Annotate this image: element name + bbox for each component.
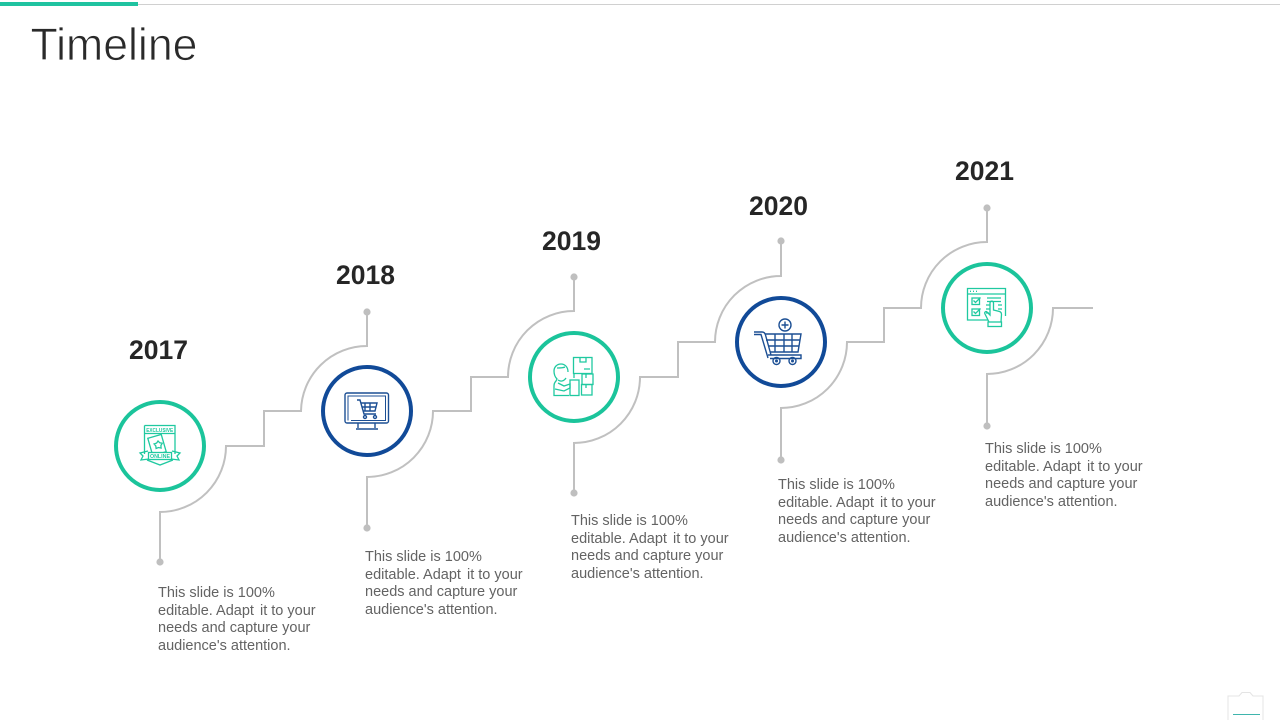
description 2019: audience's attention. xyxy=(571,566,704,582)
icon: clipboard corner mark xyxy=(1228,692,1263,720)
dots 2021 xyxy=(983,204,991,430)
icon: cart with plus xyxy=(754,319,801,364)
icon: monitor with cart xyxy=(345,393,388,429)
icon: exclusive online badge: EXCLUSIVE xyxy=(146,428,173,434)
description 2020: audience's attention. xyxy=(778,530,911,546)
description 2021: editable. Adapt it to your xyxy=(985,459,1143,475)
title: Timeline xyxy=(30,19,198,70)
description 2018: This slide is 100% xyxy=(365,549,482,565)
description 2019: needs and capture your xyxy=(571,548,724,564)
connector: 2018 to 2019 xyxy=(367,277,574,528)
connector: 2020 to 2021 xyxy=(781,208,987,460)
description 2017: needs and capture your xyxy=(158,620,311,636)
description 2021: audience's attention. xyxy=(985,494,1118,510)
milestone 2019 xyxy=(530,226,729,582)
description 2018: needs and capture your xyxy=(365,584,518,600)
icon: exclusive online badge: ONLINE xyxy=(150,454,171,460)
dots 2018 xyxy=(363,308,371,532)
ring 2020 xyxy=(737,298,825,386)
description 2017: This slide is 100% xyxy=(158,585,275,601)
description 2021: needs and capture your xyxy=(985,476,1138,492)
description 2017: audience's attention. xyxy=(158,638,291,654)
connector: 2019 to 2020 xyxy=(574,241,781,493)
ring 2019 xyxy=(530,333,618,421)
ring 2017 xyxy=(116,402,204,490)
year 2021: 2021 xyxy=(955,156,1014,186)
description 2021: This slide is 100% xyxy=(985,441,1102,457)
dots 2020 xyxy=(777,237,785,464)
year 2017: 2017 xyxy=(129,335,188,365)
dot 2017 xyxy=(156,558,164,566)
description 2019: This slide is 100% xyxy=(571,513,688,529)
description 2017: editable. Adapt it to your xyxy=(158,603,316,619)
description 2018: audience's attention. xyxy=(365,602,498,618)
icon: person with boxes xyxy=(554,358,593,396)
year 2020: 2020 xyxy=(749,191,808,221)
milestone 2021 xyxy=(943,156,1143,510)
description 2020: needs and capture your xyxy=(778,512,931,528)
connector: 2021 tail xyxy=(987,308,1093,426)
year 2019: 2019 xyxy=(542,226,601,256)
description 2020: This slide is 100% xyxy=(778,477,895,493)
ring 2021 xyxy=(943,264,1031,352)
milestone 2020 xyxy=(737,191,936,546)
milestone 2017 xyxy=(116,335,316,654)
connector: 2017 to 2018 xyxy=(160,312,367,562)
description 2019: editable. Adapt it to your xyxy=(571,531,729,547)
icon: exclusive online badge xyxy=(140,426,180,465)
icon: checklist with pointing hand xyxy=(968,288,1006,326)
dots 2019 xyxy=(570,273,578,497)
description 2020: editable. Adapt it to your xyxy=(778,495,936,511)
accent bar xyxy=(0,2,138,6)
year 2018: 2018 xyxy=(336,260,395,290)
ring 2018 xyxy=(323,367,411,455)
description 2018: editable. Adapt it to your xyxy=(365,567,523,583)
milestone 2018 xyxy=(323,260,523,618)
